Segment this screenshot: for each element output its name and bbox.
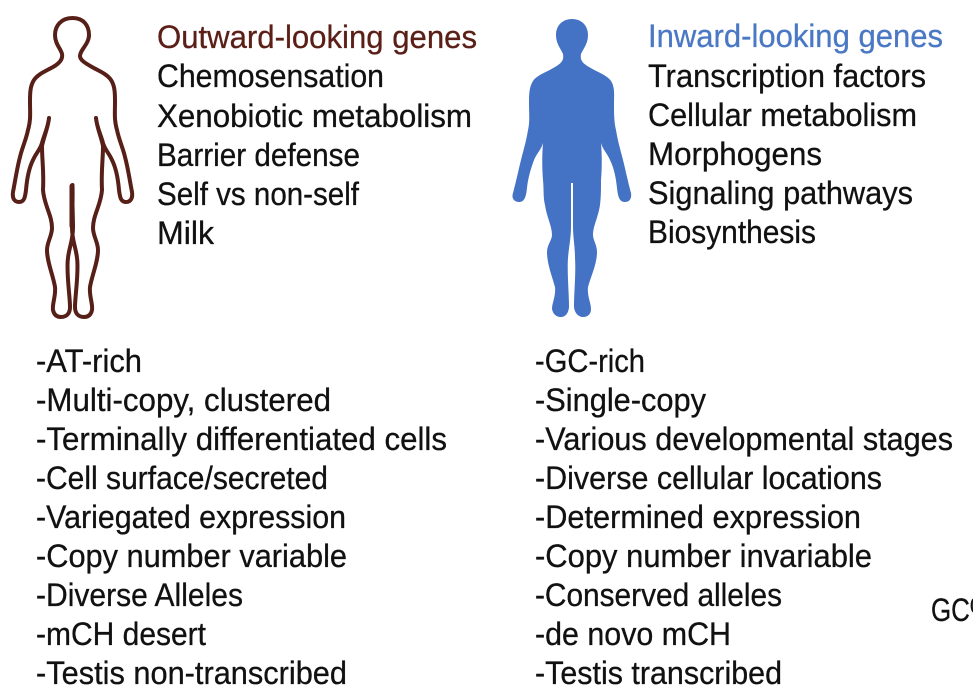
list: outward gene properties: -Cell surface/secreted <box>36 460 328 496</box>
list: inward categories: Morphogens <box>648 136 822 172</box>
list: outward categories: Milk <box>157 215 215 251</box>
list: inward categories: Signaling pathways <box>648 175 913 211</box>
heading: inward-looking genes: Inward-looking genes <box>648 18 943 54</box>
list: inward gene properties: -Various developmental stages <box>535 421 953 457</box>
list: outward gene properties: -Diverse Alleles <box>36 577 243 613</box>
list: outward categories <box>157 58 472 251</box>
list: inward gene properties: -Copy number invariable <box>535 538 872 574</box>
panel: outward-looking gene categories <box>157 19 477 251</box>
list: inward categories <box>648 58 926 250</box>
list: outward categories: Xenobiotic metabolism <box>157 98 472 134</box>
list: inward gene properties: -Diverse cellular locations <box>535 460 882 496</box>
list: inward gene properties <box>535 343 953 686</box>
panel: inward-looking gene categories <box>648 18 943 250</box>
list: outward categories: Barrier defense <box>157 137 360 173</box>
icon: outward body outline <box>13 18 132 317</box>
list: inward categories: Biosynthesis <box>648 214 816 250</box>
list: outward categories: Self vs non-self <box>157 176 359 212</box>
list: outward gene properties: -mCH desert <box>36 616 206 652</box>
list: outward gene properties: -Copy number variable <box>36 538 347 574</box>
list: inward gene properties: -Conserved alleles <box>535 577 782 613</box>
icon: inward body silhouette <box>512 19 631 317</box>
list: inward gene properties: -Single-copy <box>535 382 706 418</box>
list: outward gene properties: -Terminally differentiated cells <box>36 421 447 457</box>
list: inward gene properties: -de novo mCH <box>535 616 731 652</box>
heading: outward-looking genes: Outward-looking genes <box>157 19 477 55</box>
list: inward gene properties: -GC-rich <box>535 343 645 379</box>
list: outward gene properties <box>36 343 447 686</box>
list: inward categories: Cellular metabolism <box>648 97 917 133</box>
list: inward gene properties: -Determined expression <box>535 499 861 535</box>
list: outward categories: Chemosensation <box>157 58 384 94</box>
list: outward gene properties: -AT-rich <box>36 343 142 379</box>
list: outward gene properties: -Variegated expression <box>36 499 346 535</box>
list: inward categories: Transcription factors <box>648 58 926 94</box>
list: outward gene properties: -Multi-copy, clustered <box>36 382 331 418</box>
